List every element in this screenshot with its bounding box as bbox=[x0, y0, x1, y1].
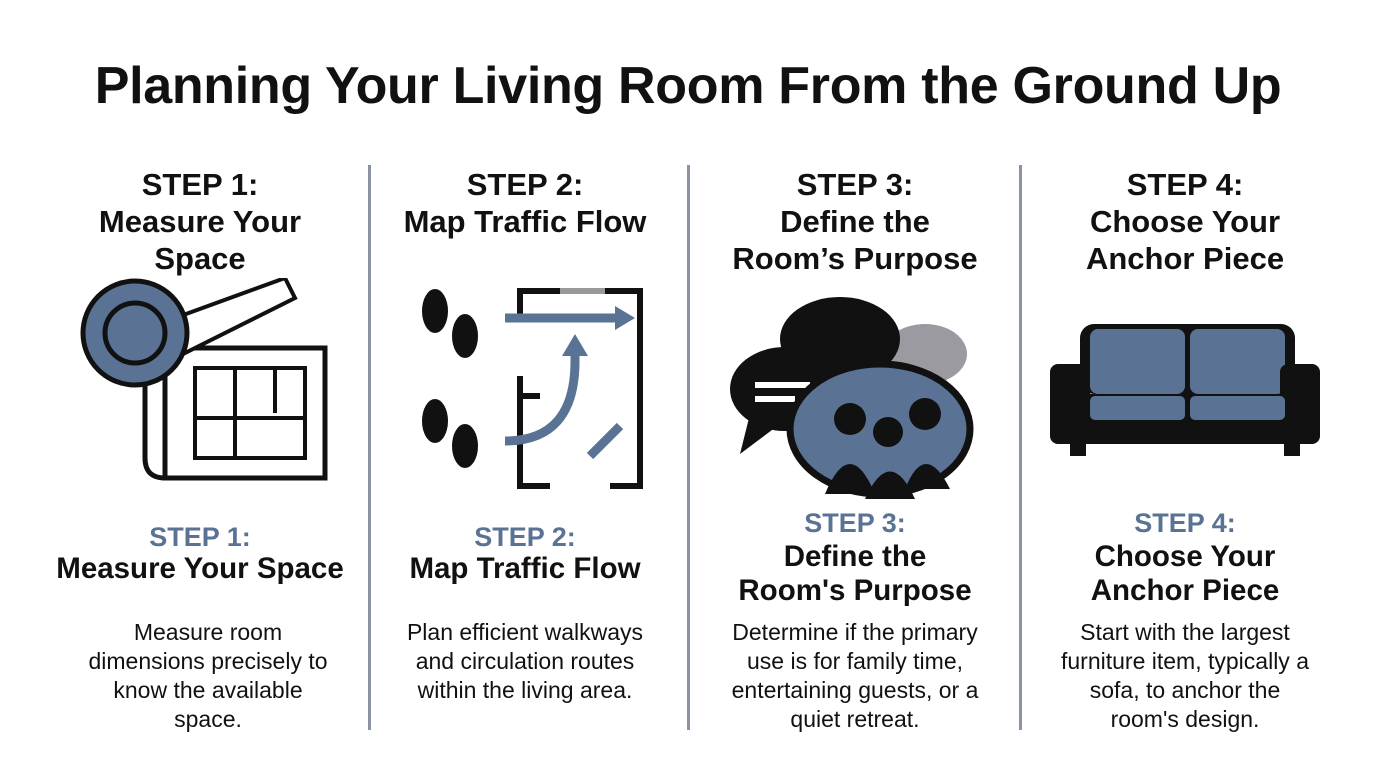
blue label 2: STEP 2: bbox=[474, 522, 576, 552]
icon: speech bubbles with people bbox=[730, 297, 974, 499]
title 3: Room's Purpose bbox=[738, 574, 972, 607]
title 2: Map Traffic Flow bbox=[409, 552, 641, 585]
title 3 bbox=[738, 540, 972, 607]
description 4: furniture item, typically a bbox=[1061, 648, 1309, 674]
heading 3: Define the bbox=[780, 204, 930, 239]
description 1 bbox=[88, 619, 328, 732]
heading 3: Room’s Purpose bbox=[732, 241, 978, 276]
heading 4: STEP 4: bbox=[1127, 167, 1243, 202]
description 3 bbox=[732, 619, 978, 732]
panel: step 1 bbox=[56, 167, 344, 732]
panel: step 3 bbox=[730, 167, 978, 732]
title 4: Anchor Piece bbox=[1091, 574, 1279, 607]
description 1: dimensions precisely to bbox=[88, 648, 328, 674]
panel: step 2 bbox=[404, 167, 646, 703]
heading 3 bbox=[732, 167, 978, 276]
heading 3: STEP 3: bbox=[797, 167, 913, 202]
heading 4 bbox=[1086, 167, 1284, 276]
description 1: know the available bbox=[113, 677, 303, 703]
panel: step 4 bbox=[1050, 167, 1320, 732]
title 1: Measure Your Space bbox=[56, 552, 344, 585]
heading 2 bbox=[404, 167, 646, 239]
icon: tape measure and floor plan bbox=[80, 278, 328, 480]
description 1: Measure room bbox=[134, 619, 282, 645]
blue label 4: STEP 4: bbox=[1134, 508, 1236, 538]
heading 1 bbox=[99, 167, 301, 276]
heading 1: Measure Your bbox=[99, 204, 301, 239]
icon: sofa bbox=[1050, 324, 1320, 456]
heading 1: Space bbox=[154, 241, 246, 276]
description 4: Start with the largest bbox=[1080, 619, 1290, 645]
description 2: within the living area. bbox=[418, 677, 632, 703]
description 4: sofa, to anchor the bbox=[1090, 677, 1280, 703]
blue label 1: STEP 1: bbox=[149, 522, 251, 552]
title 4: Choose Your bbox=[1095, 540, 1275, 573]
title 3: Define the bbox=[784, 540, 926, 573]
description 3: quiet retreat. bbox=[790, 706, 920, 732]
description 2 bbox=[407, 619, 643, 703]
title: Planning Your Living Room From the Ground Up bbox=[95, 57, 1281, 115]
description 3: use is for family time, bbox=[747, 648, 963, 674]
title 4 bbox=[1091, 540, 1279, 607]
icon: footprints and flow arrows bbox=[422, 288, 643, 489]
description 2: and circulation routes bbox=[416, 648, 634, 674]
heading 4: Choose Your bbox=[1090, 204, 1280, 239]
description 3: Determine if the primary bbox=[732, 619, 978, 645]
heading 2: STEP 2: bbox=[467, 167, 583, 202]
description 3: entertaining guests, or a bbox=[732, 677, 978, 703]
description 4 bbox=[1061, 619, 1310, 732]
heading 1: STEP 1: bbox=[142, 167, 258, 202]
blue label 3: STEP 3: bbox=[804, 508, 906, 538]
description 1: space. bbox=[174, 706, 242, 732]
heading 2: Map Traffic Flow bbox=[404, 204, 646, 239]
description 4: room's design. bbox=[1111, 706, 1259, 732]
description 2: Plan efficient walkways bbox=[407, 619, 643, 645]
heading 4: Anchor Piece bbox=[1086, 241, 1284, 276]
